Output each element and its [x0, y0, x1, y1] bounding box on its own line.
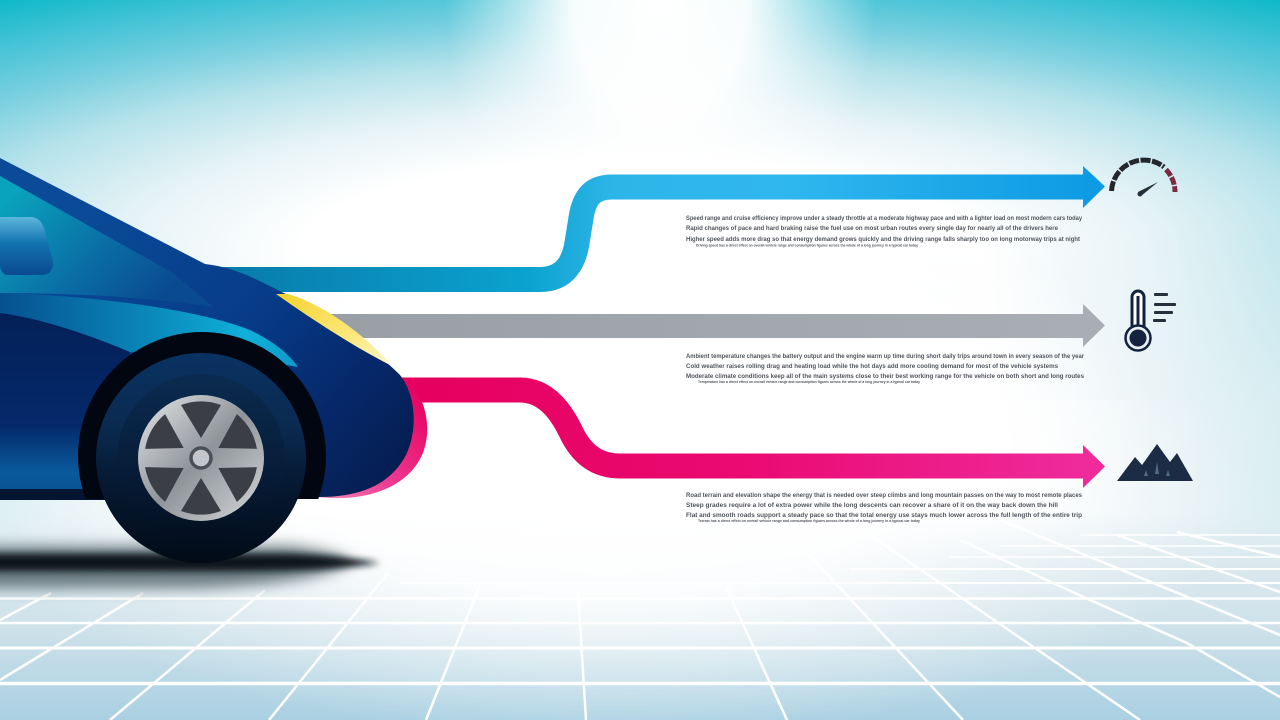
- wheel: [96, 353, 306, 563]
- sill: [0, 489, 110, 500]
- text block: temperature: [686, 353, 1084, 384]
- text block: temperature: Cold weather raises rolling drag and heating load while the hot days add more cooling demand for most of the vehicle systems: [686, 363, 1058, 370]
- arrow: blue (speed): [205, 166, 1105, 280]
- tire inner ring: [117, 374, 285, 542]
- car body: [0, 158, 414, 500]
- arrow: gray (temperature): [330, 304, 1105, 347]
- text block: temperature: Temperature has a direct effect on overall vehicle range and consumption figures across the whole of a long journey in a typical car today: [698, 380, 920, 384]
- pink swoosh under nose: [318, 378, 427, 498]
- rim: [138, 395, 264, 521]
- body highlight stripe: [0, 293, 298, 367]
- text block: terrain: Road terrain and elevation shape the energy that is needed over steep climbs and long mountain passes on the way to most remote places: [686, 492, 1082, 499]
- text block: speed: Driving speed has a direct effect on overall vehicle range and consumption figures across the whole of a long journey in a typical car today: [696, 244, 918, 248]
- arrow: pink (terrain): [400, 390, 1105, 488]
- text block: terrain: Flat and smooth roads support a steady pace so that the total energy use stays much lower across the full length of the entire trip: [686, 512, 1082, 519]
- text block: temperature: Moderate climate conditions keep all of the main systems close to their best working range for the vehicle on both short and long routes: [686, 373, 1084, 380]
- wheel arch: [78, 332, 326, 499]
- headlight: [276, 294, 392, 366]
- window: [0, 176, 213, 307]
- text block: terrain: Terrain has a direct effect on overall vehicle range and consumption figures across the whole of a long journey in a typical car today: [698, 519, 920, 523]
- car shadow: [0, 546, 380, 588]
- text block: speed: Speed range and cruise efficiency improve under a steady throttle at a moderate highway pace and with a lighter load on most modern cars today: [686, 215, 1082, 222]
- icon: thermometer: [1126, 291, 1176, 350]
- text block: speed: [686, 215, 1082, 248]
- text block: temperature: Ambient temperature changes the battery output and the engine warm up time during short daily trips around town in every season of the year: [686, 353, 1084, 360]
- side mirror: [0, 217, 53, 275]
- car: [0, 158, 427, 580]
- tire: [96, 353, 306, 563]
- lower door: [0, 313, 140, 500]
- text block: speed: Rapid changes of pace and hard braking raise the fuel use on most urban routes every single day for nearly all of the drivers here: [686, 225, 1058, 232]
- icon: mountains: [1117, 444, 1193, 481]
- floor grid: [0, 400, 1280, 720]
- hub: [191, 448, 211, 468]
- text block: terrain: Steep grades require a lot of extra power while the long descents can recover a share of it on the way back down the hill: [686, 502, 1058, 509]
- text block: speed: Higher speed adds more drag so that energy demand grows quickly and the driving range falls sharply too on long motorway trips at night: [686, 236, 1081, 243]
- text block: terrain: [686, 492, 1082, 523]
- icon: speedometer: [1112, 160, 1175, 196]
